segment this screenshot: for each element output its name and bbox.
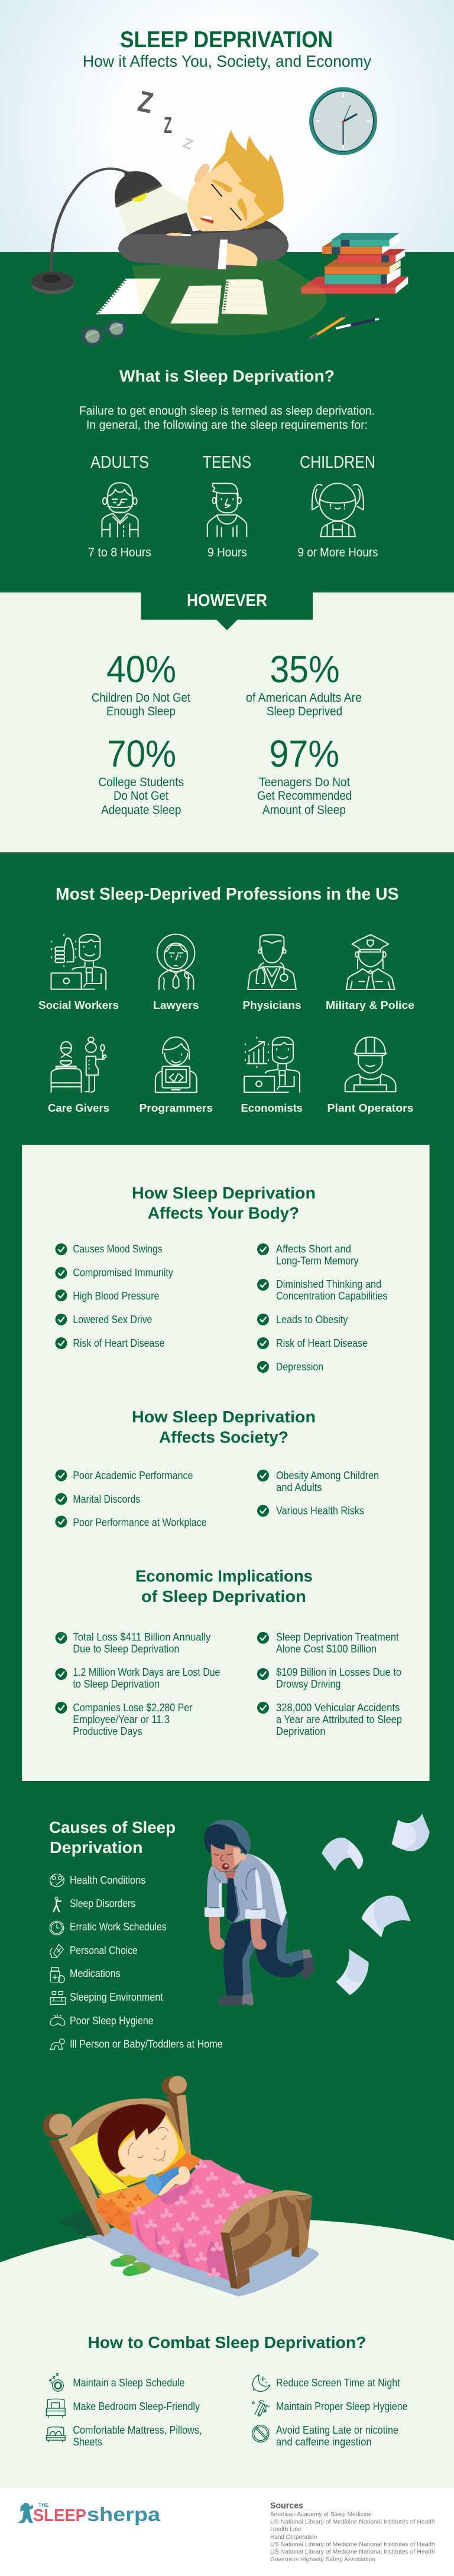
heading: what is sleep deprivation: What is Sleep Deprivation? bbox=[119, 367, 335, 385]
list: body effects right: Concentration Capabilities bbox=[276, 1290, 388, 1302]
stat: 35 percent: of American Adults Are bbox=[246, 691, 362, 705]
stat: 70 percent bbox=[98, 732, 184, 817]
list: body effects right: Affects Short and bbox=[276, 1243, 351, 1255]
icon: mattress bbox=[46, 2427, 65, 2442]
icon: sleeping environment bbox=[50, 1992, 66, 2004]
footer background bbox=[0, 2488, 454, 2576]
list: society effects right bbox=[257, 1470, 379, 1517]
heading: causes of sleep deprivation: Causes of Sleep bbox=[49, 1818, 176, 1836]
list: causes text: Medications bbox=[70, 1968, 121, 1979]
icon: sleeping Z letters: Z bbox=[181, 135, 195, 153]
list: body effects right: Long-Term Memory bbox=[276, 1255, 359, 1267]
text block: sources: Health Line bbox=[270, 2526, 301, 2533]
list: society effects right: Various Health Risks bbox=[276, 1505, 364, 1517]
heading: economic implications: Economic Implications bbox=[135, 1567, 313, 1585]
list: economic implications left: Due to Sleep Deprivation bbox=[73, 1643, 179, 1655]
heading: professions: Most Sleep-Deprived Professions in the US bbox=[56, 885, 398, 904]
icon: social worker bbox=[51, 934, 106, 989]
list: society effects right: Obesity Among Children bbox=[276, 1470, 379, 1481]
stat: 70 percent: Do Not Get bbox=[114, 789, 168, 803]
text block: sources: Sources bbox=[270, 2502, 303, 2511]
icon: health conditions bbox=[50, 1874, 64, 1887]
shirt bbox=[247, 1853, 287, 1926]
heading: affects your body bbox=[132, 1184, 316, 1222]
logo: the sleep sherpa: SLEEP bbox=[33, 2506, 86, 2525]
list: economic implications left: Total Loss $411 Billion Annually bbox=[73, 1631, 210, 1643]
panel: profession physicians: Physicians bbox=[242, 999, 301, 1011]
list: body effects left: High Blood Pressure bbox=[73, 1290, 159, 1302]
icon: police officer bbox=[346, 934, 394, 989]
text block: sources: American Academy of Sleep Medicine bbox=[270, 2511, 372, 2518]
list: body effects right: Leads to Obesity bbox=[276, 1314, 348, 1326]
list: body effects right: Diminished Thinking and bbox=[276, 1278, 381, 1290]
stat: 35 percent bbox=[246, 648, 362, 718]
icon: teen bbox=[207, 483, 247, 536]
stat: 40 percent bbox=[92, 648, 190, 718]
list: combat tips left: Sheets bbox=[73, 2436, 102, 2448]
panel: profession care givers bbox=[48, 1037, 109, 1114]
slippers bbox=[111, 2255, 151, 2276]
callout: however banner: HOWEVER bbox=[187, 591, 267, 610]
heading: economic implications: of Sleep Deprivation bbox=[141, 1587, 306, 1605]
list: economic implications left bbox=[56, 1631, 220, 1737]
list: society effects right: and Adults bbox=[276, 1481, 322, 1493]
list: causes text bbox=[70, 1874, 223, 2050]
stat: 97 percent: Get Recommended bbox=[257, 789, 352, 803]
stat: 70 percent: Adequate Sleep bbox=[101, 803, 181, 817]
icon: prohibition sign bbox=[252, 2425, 269, 2442]
list: body effects left: Risk of Heart Disease bbox=[73, 1337, 164, 1349]
panel: profession economists bbox=[241, 1037, 303, 1114]
icon: shower bbox=[252, 2401, 270, 2416]
title bbox=[83, 27, 371, 70]
panel: teens sleep requirement: 9 Hours bbox=[207, 546, 247, 559]
stat: 40 percent: Children Do Not Get bbox=[92, 691, 190, 705]
list: causes text: Health Conditions bbox=[70, 1874, 145, 1886]
text block: sources: Rand Corporation bbox=[270, 2533, 317, 2541]
panel: teens sleep requirement bbox=[203, 453, 251, 559]
panel: profession military and police: Military & Police bbox=[326, 999, 414, 1011]
list: society effects left: Poor Performance at Workplace bbox=[73, 1517, 206, 1529]
panel: profession programmers: Programmers bbox=[140, 1102, 213, 1114]
heading: causes of sleep deprivation bbox=[49, 1818, 176, 1857]
panel: children sleep requirement: CHILDREN bbox=[300, 453, 375, 472]
heading: how to combat sleep deprivation: How to Combat Sleep Deprivation? bbox=[87, 2333, 366, 2352]
panel: profession economists: Economists bbox=[241, 1102, 303, 1114]
child arm bbox=[145, 2167, 181, 2196]
text block: definition: In general, the following are the sleep requirements for: bbox=[86, 419, 368, 432]
panel: effects card bbox=[22, 1145, 429, 1781]
panel: however statistics background bbox=[0, 592, 454, 852]
icon: care giver bbox=[51, 1037, 106, 1092]
list: body effects left: Lowered Sex Drive bbox=[73, 1314, 152, 1326]
panel: adults sleep requirement: ADULTS bbox=[90, 453, 149, 472]
list: combat tips right: and caffeine ingestion bbox=[276, 2436, 372, 2448]
stat: 97 percent: Amount of Sleep bbox=[262, 803, 346, 817]
callout: however banner bbox=[141, 591, 313, 630]
text block: definition bbox=[79, 405, 375, 432]
desk lamp pool of light bbox=[132, 259, 326, 336]
list: economic implications left: Employee/Year or 11.3 bbox=[73, 1714, 170, 1725]
heading: affects society: Affects Society? bbox=[159, 1428, 288, 1447]
icon: lawyer bbox=[157, 934, 194, 989]
list: combat tips left bbox=[73, 2377, 202, 2448]
illustration: child sleeping in bed bbox=[43, 2076, 319, 2297]
list: economic implications left: Companies Lose $2,280 Per bbox=[73, 1702, 192, 1714]
list: economic implications right: 328,000 Vehicular Accidents bbox=[276, 1702, 400, 1714]
list: combat tips right: Avoid Eating Late or nicotine bbox=[276, 2424, 398, 2436]
pillow and sheet bbox=[70, 2132, 128, 2194]
list: causes text: Ill Person or Baby/Toddlers at Home bbox=[70, 2038, 223, 2050]
list: economic implications right: $109 Billion in Losses Due to bbox=[276, 1666, 401, 1678]
heading: affects society: How Sleep Deprivation bbox=[132, 1408, 316, 1426]
child face bbox=[118, 2116, 179, 2178]
icon: adult bbox=[102, 483, 138, 537]
stat: 40 percent: Enough Sleep bbox=[106, 705, 176, 718]
heading: affects society bbox=[132, 1408, 316, 1447]
head bbox=[209, 1820, 251, 1855]
icon: moon and stars bbox=[252, 2375, 270, 2391]
far leg and pants bbox=[268, 1918, 304, 1963]
list: body effects left bbox=[56, 1243, 173, 1349]
tie bbox=[226, 1878, 238, 1924]
list: combat tips left: Comfortable Mattress, Pillows, bbox=[73, 2424, 202, 2436]
list: economic implications right: Drowsy Driving bbox=[276, 1678, 340, 1690]
panel: teens sleep requirement: TEENS bbox=[203, 453, 251, 472]
icon: personal choice bbox=[50, 1945, 64, 1958]
panel: profession military and police bbox=[326, 934, 414, 1011]
logo: the sleep sherpa bbox=[18, 2502, 161, 2525]
illustration: tired man walking bbox=[204, 1814, 430, 2006]
stat: 97 percent: Teenagers Do Not bbox=[259, 776, 350, 789]
list: society effects left: Marital Discords bbox=[73, 1493, 140, 1505]
stat: 35 percent: 35% bbox=[270, 648, 339, 691]
list: causes text: Poor Sleep Hygiene bbox=[70, 2015, 154, 2027]
stat: 97 percent: 97% bbox=[270, 732, 339, 775]
panel: profession plant operators bbox=[327, 1037, 414, 1114]
panel: profession programmers bbox=[140, 1037, 213, 1114]
falling papers bbox=[322, 1814, 430, 1995]
panel: profession social workers bbox=[38, 934, 119, 1011]
panel: profession social workers: Social Workers bbox=[38, 999, 119, 1011]
list: economic implications right: Deprivation bbox=[276, 1725, 325, 1737]
list: combat tips right: Reduce Screen Time at Night bbox=[276, 2377, 400, 2389]
list: causes text: Personal Choice bbox=[70, 1945, 138, 1956]
list: causes text: Sleeping Environment bbox=[70, 1991, 163, 2003]
text block: sources: US National Library of Medicine National Institutes of Health bbox=[270, 2548, 435, 2555]
icon: physician bbox=[248, 934, 296, 989]
icons: causes bbox=[50, 1874, 66, 2049]
icon: plant operator bbox=[345, 1037, 395, 1092]
list: causes text: Sleep Disorders bbox=[70, 1898, 135, 1910]
arms and cuffs bbox=[209, 1917, 225, 1950]
bed shadow bbox=[86, 2205, 319, 2297]
list: body effects left: Compromised Immunity bbox=[73, 1267, 173, 1279]
panel: children sleep requirement: 9 or More Hours bbox=[298, 546, 378, 559]
text block: sources bbox=[270, 2502, 435, 2563]
icon: sleeping Z letters bbox=[135, 84, 195, 153]
icon: sleep disorders bbox=[54, 1897, 61, 1911]
icon: programmer bbox=[155, 1037, 197, 1092]
stat: 35 percent: Sleep Deprived bbox=[267, 705, 342, 718]
list: economic implications right: a Year are Attributed to Sleep bbox=[276, 1714, 402, 1725]
icon: poor sleep hygiene bbox=[50, 2014, 65, 2025]
list: economic implications left: 1.2 Million Work Days are Lost Due bbox=[73, 1666, 220, 1678]
desk illustration bbox=[31, 130, 408, 344]
list: combat tips right bbox=[276, 2377, 408, 2448]
section background: cream hill and floor bbox=[0, 2219, 454, 2488]
hero wall background bbox=[0, 0, 454, 252]
icon: medications bbox=[50, 1968, 64, 1983]
icons: combat tips bbox=[46, 2373, 270, 2442]
text block: sources: US National Library of Medicine National Institutes of Health bbox=[270, 2541, 435, 2548]
list: economic implications right: Sleep Deprivation Treatment bbox=[276, 1631, 398, 1643]
list: combat tips left: Maintain a Sleep Schedule bbox=[73, 2377, 184, 2389]
heading: causes of sleep deprivation: Deprivation bbox=[50, 1838, 143, 1857]
list: economic implications left: Productive Days bbox=[73, 1725, 142, 1737]
list: body effects right: Risk of Heart Disease bbox=[276, 1337, 368, 1349]
book stack bbox=[301, 233, 408, 294]
icon: child bbox=[312, 483, 364, 536]
lamp bbox=[31, 169, 188, 294]
headboard bbox=[67, 2098, 191, 2196]
icon: economist bbox=[244, 1037, 300, 1092]
text block: definition: Failure to get enough sleep is termed as sleep deprivation. bbox=[79, 405, 375, 418]
list: body effects left: Causes Mood Swings bbox=[73, 1243, 162, 1255]
panel: profession physicians bbox=[242, 934, 301, 1011]
panel: children sleep requirement bbox=[298, 453, 378, 559]
icon: erratic work schedules bbox=[50, 1921, 64, 1935]
stat: 40 percent: 40% bbox=[106, 648, 176, 691]
list: body effects right bbox=[257, 1243, 388, 1373]
heading: affects your body: How Sleep Deprivation bbox=[132, 1184, 316, 1202]
text block: sources: US National Library of Medicine National Institutes of Health bbox=[270, 2518, 435, 2525]
panel: profession plant operators: Plant Operators bbox=[327, 1102, 414, 1114]
list: economic implications right: Alone Cost $100 Billion bbox=[276, 1643, 377, 1655]
icon: sleeping Z letters: Z bbox=[164, 113, 172, 138]
list: society effects left: Poor Academic Performance bbox=[73, 1470, 193, 1481]
logo: the sleep sherpa: sherpa bbox=[87, 2503, 161, 2525]
title: How it Affects You, Society, and Economy bbox=[83, 52, 371, 70]
panel: profession care givers: Care Givers bbox=[48, 1102, 109, 1114]
icon: wall clock bbox=[309, 87, 377, 155]
icon: baby at home bbox=[50, 2039, 64, 2049]
panel: profession lawyers: Lawyers bbox=[153, 999, 199, 1011]
blanket bbox=[129, 2160, 274, 2281]
icon: sherpa silhouette bbox=[18, 2503, 33, 2523]
stat: 97 percent bbox=[257, 732, 352, 817]
panel: profession lawyers bbox=[153, 934, 199, 1011]
list: economic implications left: to Sleep Deprivation bbox=[73, 1678, 160, 1690]
pencil and pen bbox=[310, 315, 379, 340]
text block: sources: Governors Highway Safety Association bbox=[270, 2556, 375, 2563]
list: society effects left bbox=[56, 1470, 206, 1529]
list: causes text: Erratic Work Schedules bbox=[70, 1921, 167, 1933]
footboard bbox=[229, 2196, 313, 2276]
list: combat tips left: Make Bedroom Sleep-Friendly bbox=[73, 2401, 200, 2412]
heading: economic implications bbox=[135, 1567, 313, 1605]
stat: 70 percent: 70% bbox=[107, 732, 176, 775]
shoes bbox=[219, 1996, 244, 2005]
title: SLEEP DEPRIVATION bbox=[120, 27, 333, 53]
papers on desk bbox=[96, 279, 267, 324]
list: body effects right: Depression bbox=[276, 1361, 323, 1373]
panel: adults sleep requirement: 7 to 8 Hours bbox=[88, 546, 151, 559]
icon: bedroom bbox=[46, 2399, 65, 2418]
heading: affects your body: Affects Your Body? bbox=[148, 1204, 299, 1222]
sleeping man bbox=[118, 130, 288, 270]
icon: sleep schedule bbox=[49, 2373, 63, 2391]
list: economic implications right bbox=[257, 1631, 402, 1737]
panel: adults sleep requirement bbox=[88, 453, 151, 559]
list: combat tips right: Maintain Proper Sleep Hygiene bbox=[276, 2401, 408, 2412]
logo: the sleep sherpa: THE bbox=[38, 2502, 48, 2508]
icon: sleeping Z letters: Z bbox=[135, 84, 156, 120]
glasses bbox=[80, 320, 126, 344]
stat: 70 percent: College Students bbox=[98, 776, 184, 789]
